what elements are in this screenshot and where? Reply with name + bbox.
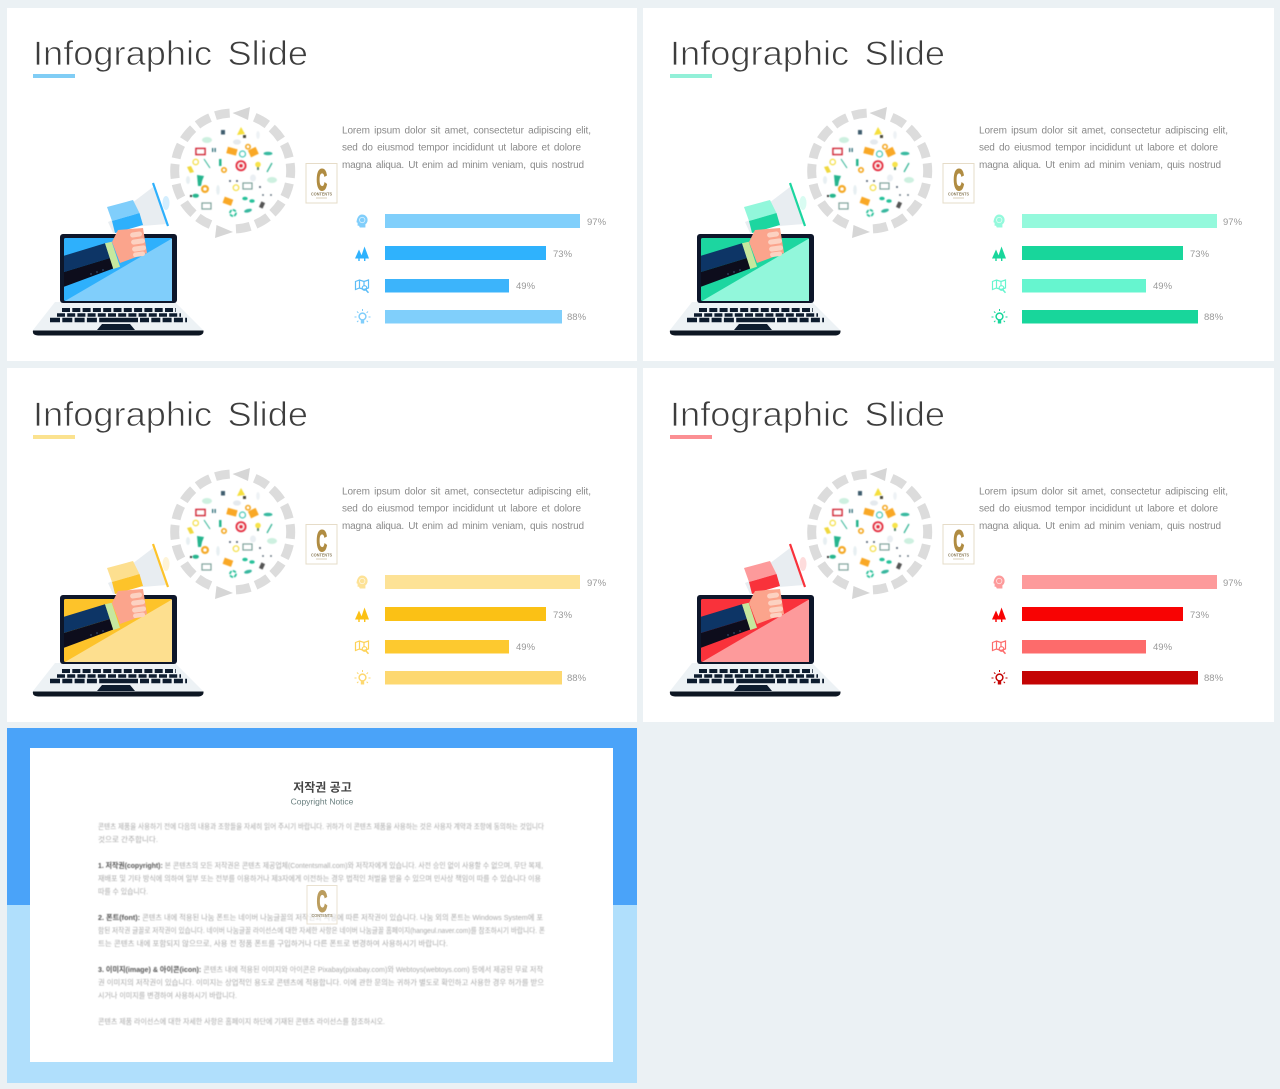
panel: red slide — [643, 368, 1274, 722]
bar 73% — [1022, 246, 1183, 260]
bar 88% — [1022, 671, 1198, 684]
paragraph — [342, 126, 591, 171]
title: Infographic Slide — [670, 35, 945, 73]
bar 88% — [1022, 310, 1198, 324]
notice body text: 권 이미지의 저작권이 있습니다. 이미지는 상업적인 용도로 콘텐츠에 적용합니다. 이에 관한 문의는 귀하가 별도로 확인하고 사용한 경우 허가를 받으 — [98, 978, 544, 987]
value 97%: 97% — [1223, 578, 1243, 589]
paragraph: sed do eiusmod tempor incididunt ut labore et dolore — [979, 504, 1218, 514]
bar 97% — [385, 575, 580, 589]
value 88%: 88% — [567, 673, 587, 684]
illustration: laptop megaphone with icon circle — [33, 95, 308, 336]
value 49%: 49% — [1153, 642, 1173, 653]
value 49%: 49% — [1153, 281, 1173, 292]
icon: map — [356, 280, 368, 293]
paragraph — [342, 486, 591, 532]
logo watermark — [306, 164, 337, 203]
notice body text: 2. 폰트(font): 콘텐츠 내에 적용된 나눔 폰트는 네이버 나눔글꼴의 저작권과 사용에 따른 저작권이 있습니다. 나눔 외의 폰트는 Windows System에 포 — [98, 913, 543, 922]
paragraph: sed do eiusmod tempor incididunt ut labore et dolore — [342, 504, 581, 514]
bar 73% — [385, 246, 546, 260]
value 73%: 73% — [1190, 249, 1210, 260]
logo watermark: CONTENTS — [311, 552, 332, 558]
logo watermark: C — [954, 164, 964, 197]
icon: trees — [992, 246, 1006, 261]
icon: trees — [355, 246, 369, 261]
notice body text: 함된 저작권 글꼴로 저작권이 있습니다. 네이버 나눔글꼴 라이선스에 대한 자세한 사항은 네이버 나눔글꼴 홈페이지(hangeul.naver.com)를 참조하시기 바랍니다. 폰 — [98, 926, 545, 935]
panel: copyright notice — [7, 728, 637, 1083]
paragraph: Lorem ipsum dolor sit amet, consectetur adipiscing elit, — [342, 486, 591, 498]
notice heading: 저작권 공고 — [293, 780, 352, 794]
logo watermark — [943, 524, 974, 564]
paragraph: magna aliqua. Ut enim ad minim veniam, quis nostrud — [342, 160, 584, 171]
notice body text: 시거나 이미지를 변경하여 사용하시기 바랍니다. — [98, 991, 237, 1000]
logo watermark: CONTENTS — [311, 192, 332, 196]
value 73%: 73% — [553, 249, 573, 260]
title: Infographic Slide — [33, 396, 308, 434]
bar 88% — [385, 310, 562, 324]
paragraph: Lorem ipsum dolor sit amet, consectetur adipiscing elit, — [979, 126, 1228, 136]
notice body text: 콘텐츠 제품 라이선스에 대한 자세한 사항은 홈페이지 하단에 기재된 콘텐츠 라이선스를 참조하시오. — [98, 1017, 385, 1026]
value 88%: 88% — [567, 312, 587, 323]
icon: head — [356, 576, 368, 588]
icon: map — [356, 641, 368, 654]
icon: trees — [992, 608, 1006, 622]
icon: bulb — [992, 309, 1008, 324]
notice body text: 3. 이미지(image) & 아이콘(icon): 콘텐츠 내에 적용된 이미지와 아이콘은 Pixabay(pixabay.com)와 Webtoys(webtoys.com) 등에서 제공된 무료 저작 — [98, 965, 543, 974]
value 97%: 97% — [587, 578, 607, 589]
logo watermark: CONTENTS — [948, 192, 969, 196]
notice body text: 따를 수 있습니다. — [98, 887, 148, 896]
icon: bulb — [992, 670, 1008, 684]
notice body text — [98, 822, 545, 1026]
paragraph: sed do eiusmod tempor incididunt ut labore et dolore — [979, 142, 1218, 154]
icon: head — [994, 576, 1005, 588]
value 73%: 73% — [553, 610, 573, 621]
paragraph — [979, 126, 1228, 171]
notice body text: 콘텐츠 제품을 사용하기 전에 다음의 내용과 조항들을 자세히 읽어 주시기 바랍니다. 귀하가 이 콘텐츠 제품을 사용하는 것은 사용자 계약과 조항에 동의하는 것입니다 — [98, 822, 544, 831]
title underline — [670, 435, 712, 439]
bar 49% — [1022, 640, 1146, 654]
value 73%: 73% — [1190, 610, 1210, 621]
logo watermark: C — [316, 525, 327, 558]
notice body text: 1. 저작권(copyright): 본 콘텐츠의 모든 저작권은 콘텐츠 제공업체(Contentsmall.com)와 저작자에게 있습니다. 사전 승인 없이 사용할 수 없으며, 무단 복제, — [98, 861, 543, 870]
logo watermark: C — [316, 164, 327, 197]
logo watermark — [307, 886, 337, 924]
icon: trees — [355, 608, 369, 622]
title underline — [33, 435, 75, 439]
paragraph: magna aliqua. Ut enim ad minim veniam, quis nostrud — [342, 521, 584, 532]
value 97%: 97% — [1223, 217, 1243, 228]
value 97%: 97% — [587, 217, 607, 228]
paragraph: sed do eiusmod tempor incididunt ut labore et dolore — [342, 142, 581, 154]
bar 49% — [1022, 279, 1146, 292]
logo watermark — [306, 524, 337, 564]
bar 73% — [1022, 607, 1183, 621]
panel: blue slide — [7, 8, 637, 361]
logo watermark: CONTENTS — [312, 913, 332, 918]
paragraph: magna aliqua. Ut enim ad minim veniam, quis nostrud — [979, 521, 1221, 532]
bar 97% — [1022, 214, 1217, 228]
logo watermark: CONTENTS — [948, 552, 969, 558]
notice body text: 트는 콘텐츠 내에 포함되지 않으므로, 사용 전 정품 폰트를 구입하거나 다른 폰트로 변경하여 사용하시기 바랍니다. — [98, 939, 448, 948]
icon: head — [994, 214, 1005, 228]
logo watermark: C — [954, 525, 964, 558]
icon: bulb — [354, 309, 370, 324]
logo watermark — [943, 164, 974, 203]
notice subheading: Copyright Notice — [291, 796, 354, 806]
panel: green slide — [643, 8, 1274, 361]
icon: map — [992, 641, 1006, 654]
icon: head — [356, 214, 368, 228]
illustration: laptop megaphone with icon circle — [33, 456, 308, 696]
panel: yellow slide — [7, 368, 637, 722]
bar 88% — [385, 671, 562, 684]
value 88%: 88% — [1204, 673, 1224, 684]
illustration: laptop megaphone with icon circle — [670, 456, 945, 696]
value 88%: 88% — [1204, 312, 1224, 323]
bar 97% — [385, 214, 580, 228]
notice body text: 것으로 간주합니다. — [98, 835, 158, 844]
title: Infographic Slide — [670, 396, 945, 434]
notice body text: 재배포 및 기타 방식에 의하여 일부 또는 전부를 이용하거나 제3자에게 이전하는 경우 법적인 처벌을 받을 수 있으며 민사상 책임이 따를 수 있습니다 이용 — [98, 874, 541, 883]
illustration: laptop megaphone with icon circle — [670, 95, 945, 336]
bar 49% — [385, 640, 509, 654]
title underline — [33, 74, 75, 78]
icon: map — [992, 280, 1006, 293]
title: Infographic Slide — [33, 35, 308, 73]
title underline — [670, 74, 712, 78]
icon: bulb — [354, 670, 370, 684]
bar 49% — [385, 279, 509, 292]
paragraph — [979, 486, 1228, 532]
value 49%: 49% — [516, 642, 536, 653]
paragraph: Lorem ipsum dolor sit amet, consectetur adipiscing elit, — [979, 486, 1228, 498]
bar 97% — [1022, 575, 1217, 589]
value 49%: 49% — [516, 281, 536, 292]
bar 73% — [385, 607, 546, 621]
paragraph: magna aliqua. Ut enim ad minim veniam, quis nostrud — [979, 160, 1221, 171]
paragraph: Lorem ipsum dolor sit amet, consectetur adipiscing elit, — [342, 126, 591, 136]
logo watermark: C — [317, 886, 327, 918]
